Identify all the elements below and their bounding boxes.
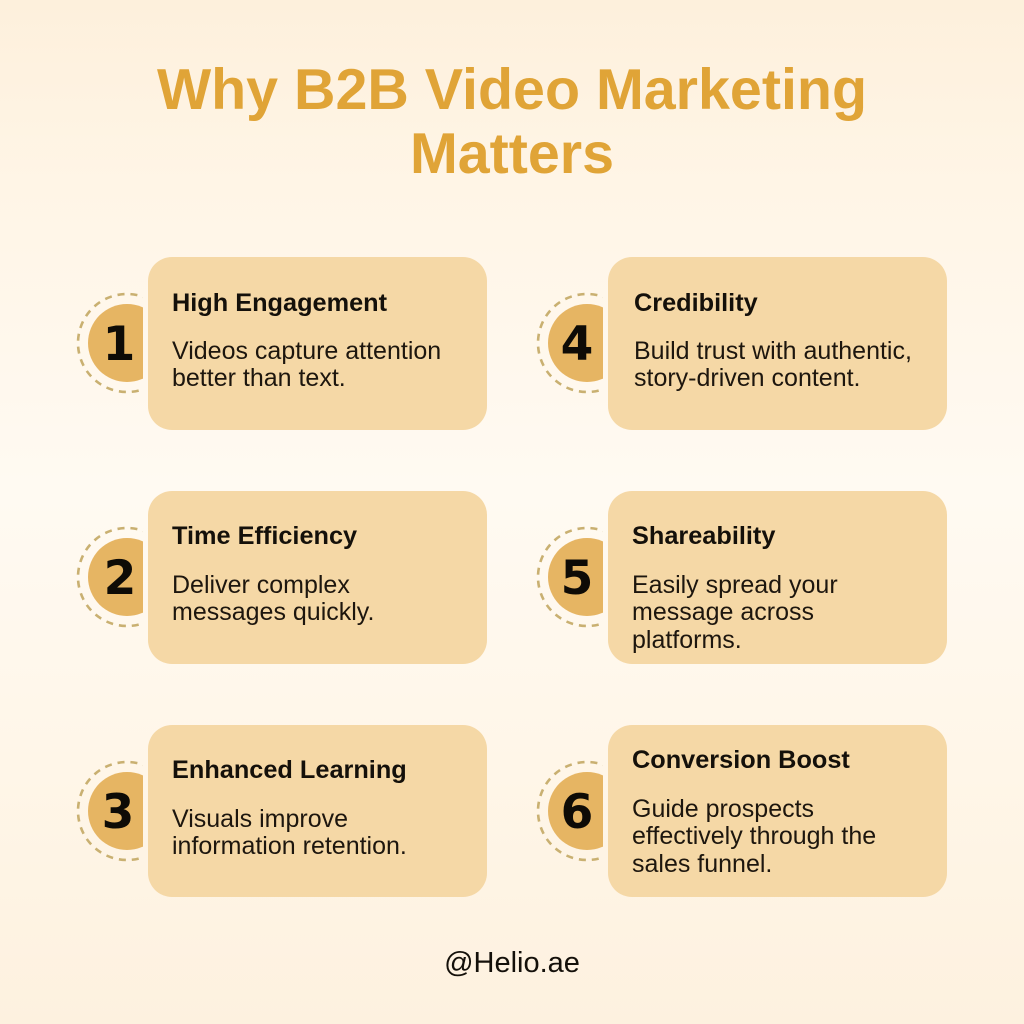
badge 2 bbox=[76, 526, 143, 628]
description: effectively through the bbox=[632, 822, 876, 850]
description: better than text. bbox=[172, 364, 346, 392]
panel: Shareability bbox=[608, 491, 947, 664]
badge 5: 5 bbox=[561, 551, 593, 606]
description: messages quickly. bbox=[172, 598, 374, 626]
panel: Conversion Boost bbox=[608, 725, 947, 897]
badge 1 bbox=[76, 292, 143, 394]
description bbox=[172, 337, 441, 392]
badge 6 bbox=[536, 760, 603, 862]
heading: Time Efficiency bbox=[172, 522, 357, 550]
footer handle: @Helio.ae bbox=[444, 947, 580, 979]
description: Visuals improve bbox=[172, 805, 348, 833]
description bbox=[172, 805, 407, 860]
heading: Enhanced Learning bbox=[172, 756, 407, 784]
description: platforms. bbox=[632, 626, 742, 654]
panel: Credibility bbox=[608, 257, 947, 430]
heading: High Engagement bbox=[172, 289, 387, 317]
badge 3: 3 bbox=[102, 785, 134, 840]
badge 6: 6 bbox=[561, 785, 593, 840]
description bbox=[632, 571, 838, 654]
badge 3 bbox=[76, 760, 143, 862]
heading: Shareability bbox=[632, 522, 775, 550]
description: story-driven content. bbox=[634, 364, 860, 392]
description bbox=[632, 795, 876, 878]
panel: High Engagement bbox=[148, 257, 487, 430]
title: Matters bbox=[410, 122, 614, 186]
description: information retention. bbox=[172, 832, 407, 860]
panel: Enhanced Learning bbox=[148, 725, 487, 897]
heading: Credibility bbox=[634, 289, 758, 317]
description: Easily spread your bbox=[632, 571, 838, 599]
description: Build trust with authentic, bbox=[634, 337, 912, 365]
title bbox=[157, 58, 867, 186]
description: message across bbox=[632, 598, 814, 626]
description: Videos capture attention bbox=[172, 337, 441, 365]
title: Why B2B Video Marketing bbox=[157, 58, 867, 122]
description bbox=[634, 337, 912, 392]
heading: Conversion Boost bbox=[632, 746, 850, 774]
description: sales funnel. bbox=[632, 850, 772, 878]
description: Guide prospects bbox=[632, 795, 814, 823]
badge 2: 2 bbox=[104, 551, 136, 606]
badge 1: 1 bbox=[103, 317, 135, 372]
badge 5 bbox=[536, 526, 603, 628]
description: Deliver complex bbox=[172, 571, 350, 599]
badge 4: 4 bbox=[561, 317, 593, 372]
description bbox=[172, 571, 374, 626]
badge 4 bbox=[536, 292, 603, 394]
panel: Time Efficiency bbox=[148, 491, 487, 664]
